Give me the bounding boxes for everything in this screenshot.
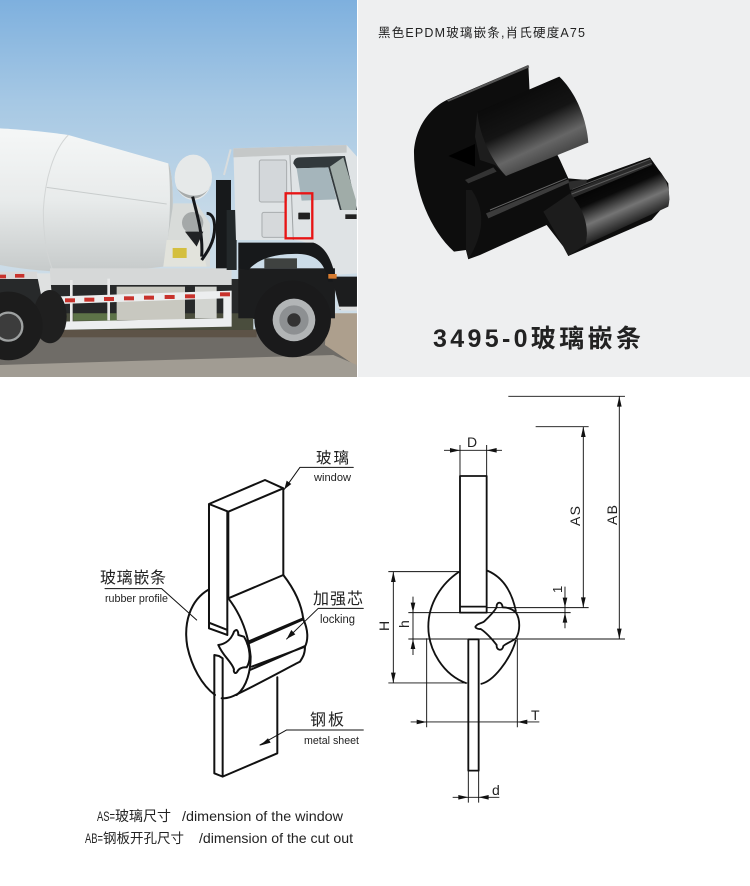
footnote: dimension definitions: AS= [97,808,115,824]
diagram: isometric installation view [105,467,363,777]
footnote: dimension definitions: 钢板开孔尺寸 [103,831,184,846]
cab body [224,149,231,175]
footnote: dimension definitions: /dimension of the cut out [199,830,353,846]
footnote: dimension definitions [85,808,353,846]
label: locking: 加强芯 [313,590,363,608]
dimension labels: 1 [550,586,565,593]
dimension lines [388,396,625,803]
dimension labels: h [396,620,412,628]
label: metal sheet: metal sheet [304,735,359,747]
dimension labels [376,434,620,798]
red highlight box [286,193,312,238]
description text: 黑色EPDM玻璃嵌条,肖氏硬度A75 [378,25,585,40]
dimension labels: AB [604,505,620,525]
mixer drum [0,128,173,272]
dimension labels: d [492,782,500,798]
leader lines [105,467,363,745]
profile outline [428,571,516,684]
chassis [0,279,257,319]
dimension labels: H [376,621,392,631]
label: window: 玻璃 [316,449,349,467]
metal sheet [214,655,277,777]
pump and frame [163,203,210,267]
dimension labels: AS [567,506,583,526]
cab frame [216,180,231,268]
title: 3495-0玻璃嵌条 [433,325,641,353]
glass section [460,476,487,613]
label: locking [313,590,363,626]
leader arrowheads [260,481,295,746]
dimension arrowheads [391,396,622,800]
steel section [468,639,479,771]
rear wheels [33,290,67,343]
dimension labels: D [467,434,477,450]
footnote: dimension definitions: AB= [85,830,103,846]
side guard [52,291,232,330]
photo: concrete mixer truck [0,0,357,377]
label: window [313,449,351,484]
label: window: window [313,472,351,484]
front wheel [254,281,331,357]
diagram: dimensioned cross-section [388,396,625,803]
rubber profile [186,575,307,698]
label: rubber profile: 玻璃嵌条 [100,569,166,587]
label: metal sheet: 钢板 [310,711,344,729]
water tank [175,155,212,200]
panel: product background [358,0,750,377]
footnote: dimension definitions: /dimension of the window [182,808,344,824]
window glass [209,480,283,635]
dimension labels: T [531,707,540,723]
wheel arch [238,268,335,318]
footnote: dimension definitions: 玻璃尺寸 [115,808,171,824]
label: rubber profile [100,569,168,605]
ground [0,330,357,377]
label: metal sheet [304,711,359,747]
product render: black rubber profile [414,65,669,259]
label: locking: locking [320,614,355,626]
label: rubber profile: rubber profile [105,593,168,605]
